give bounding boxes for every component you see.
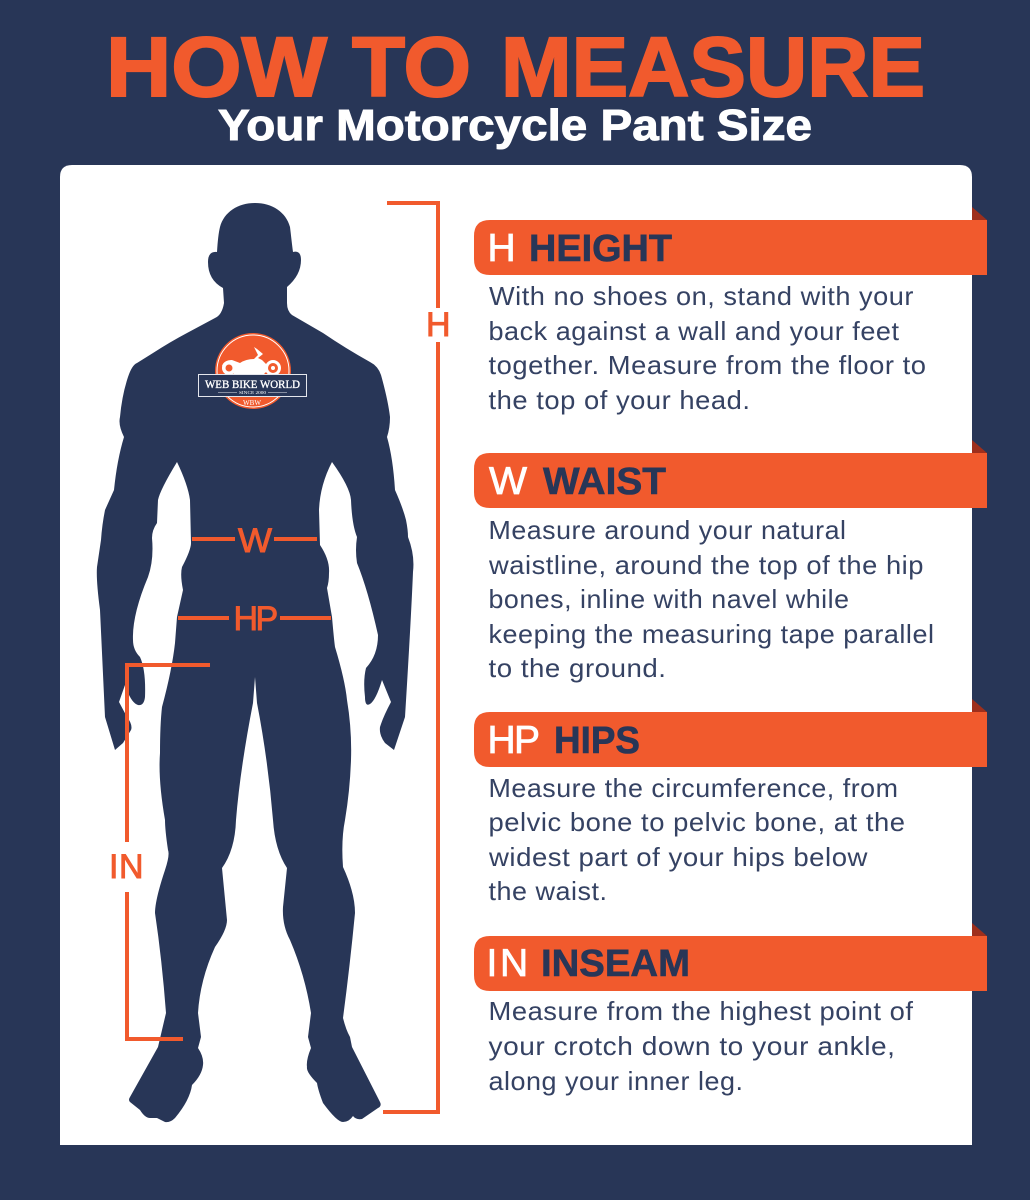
panel: white card (60, 165, 972, 1145)
banner: height (474, 207, 987, 275)
banner: inseam (474, 923, 987, 991)
banner: inseam: N (500, 942, 528, 985)
text: height instructions: With no shoes on, stand with your (489, 281, 914, 311)
banner: waist: WAIST (543, 461, 666, 503)
waist marker (192, 522, 317, 560)
waist marker: W (238, 522, 272, 560)
text: waist instructions: Measure around your natural (488, 515, 846, 545)
text: waist instructions: to the ground. (488, 653, 666, 683)
text: height instructions (488, 281, 926, 415)
height bracket (383, 203, 451, 1112)
text: hips instructions (488, 773, 906, 906)
text: height instructions: back against a wall and your feet (488, 316, 900, 346)
text: hips instructions: pelvic bone to pelvic bone, at the (488, 807, 906, 837)
banner: inseam: I (486, 942, 497, 985)
banner: inseam: INSEAM (541, 943, 690, 985)
text: height instructions: together. Measure from the floor to (488, 350, 926, 380)
subtitle: Your Motorcycle Pant Size (218, 101, 812, 150)
banner: height: HEIGHT (529, 228, 672, 270)
title: MEASURE (501, 20, 925, 114)
inseam bracket (109, 665, 210, 1039)
logo: Web Bike World: SINCE 2000 (239, 390, 267, 395)
section: height (474, 207, 987, 415)
icon: motorcycle (222, 347, 281, 376)
logo: Web Bike World: WBW (243, 399, 261, 407)
banner: hips: P (514, 719, 540, 762)
section: hips (474, 699, 987, 906)
text: waist instructions: bones, inline with navel while (488, 584, 850, 614)
body silhouette (97, 203, 413, 1122)
inseam bracket: I (109, 848, 118, 886)
text: hips instructions: the waist. (488, 876, 608, 906)
section: inseam (474, 923, 987, 1096)
banner: waist (474, 440, 987, 508)
banner: height: H (488, 227, 516, 270)
text: inseam instructions: Measure from the highest point of (488, 996, 914, 1026)
text: inseam instructions (488, 996, 914, 1096)
hips marker: H (234, 600, 258, 638)
title (106, 20, 925, 114)
banner: hips: HIPS (554, 720, 640, 762)
text: inseam instructions: your crotch down to your ankle, (488, 1031, 896, 1061)
text: waist instructions: keeping the measuring tape parallel (488, 619, 934, 649)
banner: waist: W (489, 460, 527, 503)
banner: hips: H (488, 719, 516, 762)
inseam bracket: N (119, 848, 144, 886)
banner: hips (474, 699, 987, 767)
hips marker (178, 600, 331, 638)
text: hips instructions: widest part of your hips below (488, 842, 868, 872)
text: hips instructions: Measure the circumference, from (488, 773, 898, 803)
section: waist (474, 440, 987, 683)
height bracket: H (426, 306, 451, 344)
hips marker: P (256, 600, 278, 638)
title: HOW (106, 20, 328, 114)
text: inseam instructions: along your inner leg. (488, 1066, 744, 1096)
logo: Web Bike World (198, 333, 306, 409)
text: waist instructions: waistline, around the top of the hip (488, 550, 924, 580)
text: height instructions: the top of your head. (488, 385, 750, 415)
title: TO (352, 20, 471, 114)
logo: Web Bike World: WEB BIKE WORLD (205, 377, 300, 391)
text: waist instructions (488, 515, 934, 683)
